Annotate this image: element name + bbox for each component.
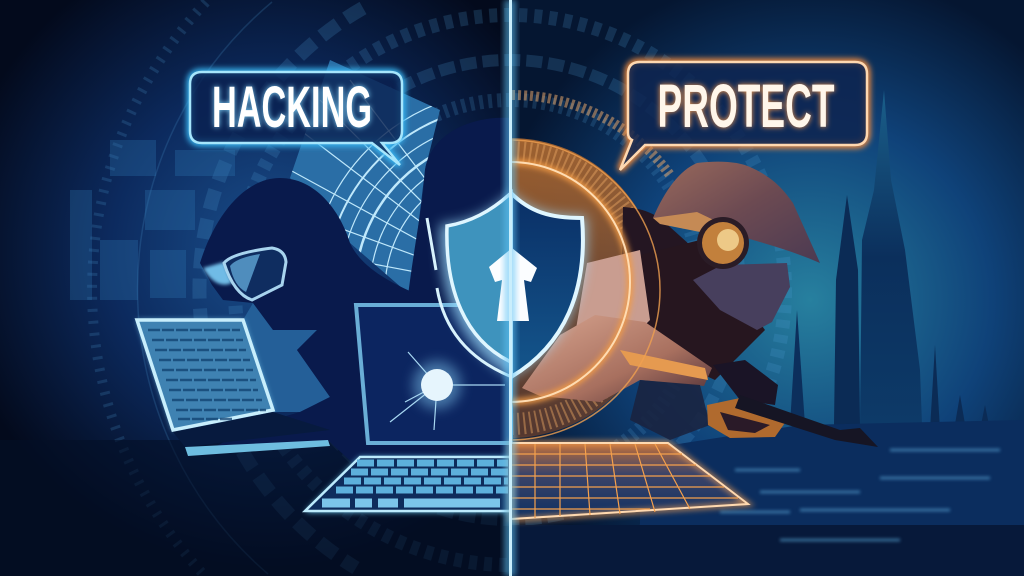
heading: hacking: HACKING: [212, 75, 372, 140]
second figure silhouette: [408, 118, 511, 310]
center divider line: [504, 0, 516, 576]
arm armor: [522, 315, 712, 402]
city skyline: [790, 90, 990, 430]
hand: [713, 360, 778, 405]
face: [693, 263, 790, 330]
protect speech bubble: [620, 62, 867, 170]
orange pouch: [707, 398, 787, 438]
helmet: [653, 162, 820, 263]
dark strut below arm: [630, 380, 710, 440]
orange grid keyboard: [511, 443, 748, 520]
data rings: [92, 2, 785, 574]
glow: protect: PROTECT: [658, 72, 834, 140]
icon: goggles: [203, 248, 286, 300]
hacker silhouette: [200, 178, 511, 470]
lit grid behind the hacker: [290, 60, 440, 290]
armored figure: [522, 162, 878, 447]
glow: hacking: HACKING: [212, 75, 372, 140]
keyboard: [305, 457, 511, 512]
ground streaks: [720, 450, 1000, 540]
shield: [427, 192, 587, 377]
small laptop: [137, 320, 330, 456]
ground on right: [640, 420, 1024, 576]
background: left half: [0, 0, 511, 576]
helmet ear disc: [697, 217, 749, 269]
heading: protect: PROTECT: [658, 72, 834, 140]
background: right half: [511, 0, 1024, 576]
left block texture: [70, 140, 235, 300]
laptop glow dot: [390, 352, 505, 430]
hacking speech bubble: [190, 72, 402, 165]
left lower dark mass: [0, 440, 511, 576]
shoulder armor: [575, 250, 650, 335]
hair: [622, 207, 690, 268]
translucent map beside laptop: [243, 303, 330, 412]
dark lower ground band: [511, 525, 1024, 576]
big laptop: [305, 305, 511, 512]
shield outer line: [427, 218, 512, 377]
orange arm highlight: [620, 350, 708, 380]
orange ring band: [512, 90, 674, 438]
torso and collar: [620, 240, 765, 380]
lance: [735, 395, 878, 447]
icon: keyhole arrow: [489, 248, 537, 321]
orange inner ring: [512, 139, 661, 441]
